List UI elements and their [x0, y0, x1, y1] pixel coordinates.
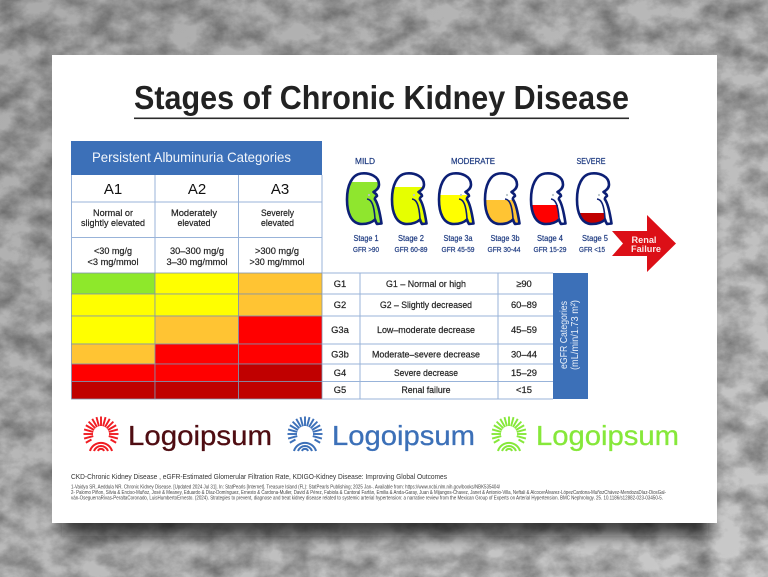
stage labels: GFR <15 — [579, 245, 605, 254]
row G5 — [334, 384, 532, 395]
stage labels — [353, 233, 608, 254]
stage labels: Stage 3b — [490, 233, 520, 243]
panel: persistent albuminuria categories table — [71, 141, 322, 273]
severity headings: SEVERE — [576, 157, 606, 166]
title: Stages of Chronic Kidney Disease — [134, 79, 629, 116]
column A1: Normal or — [93, 208, 133, 218]
logo: blue — [288, 416, 475, 451]
row G3b: Moderate–severe decrease — [372, 348, 480, 360]
icon: kidney stage 2 — [391, 173, 429, 226]
column A2: elevated — [178, 218, 210, 228]
references: ván-OseguerraRivas-PeraltaCoronado, LuisHumbertoErnesto. (2024). Strategies to prevent, diagnose and treat kidney disease related to systemic arterial hypertension: a narrative review from the Mexican Group of Experts on Arterial Hypertension. BMC Nephrology. 25. 10.1186/s12882-023-03450-5. — [71, 496, 663, 502]
stage labels: Stage 2 — [398, 233, 424, 243]
icon: kidney stage 3b — [484, 173, 522, 226]
icon: kidney stage 4 — [530, 173, 566, 226]
row G2: G2 — [334, 299, 346, 310]
row G1: G1 – Normal or high — [386, 278, 466, 289]
row G3a — [331, 324, 537, 335]
icon: kidney stage 3a — [438, 173, 476, 226]
row G2: G2 – Slightly decreased — [380, 299, 472, 310]
references: 1-Vaidya SR, Aeddula NR. Chronic Kidney Disease. [Updated 2024 Jul 31]. In: StatPearls [Internet]. Treasure Island (FL): StatPearls Publishing; 2025 Jan-. Available from: https://www.ncbi.nlm.nih.gov/books/NBK535404/ — [71, 484, 501, 490]
stage labels: Stage 4 — [537, 233, 563, 243]
stage labels: GFR 30-44 — [488, 245, 520, 254]
column A2: Moderately — [171, 208, 217, 218]
references: 2- Palomo Piñon, Silvia & Enciso-Muñoz, José & Meaney, Eduardo & Díaz-Domínguez, Ernesto & Cardona-Muller, David & Pérez, Fabiola & Cantoral Farfán, Emilia & Anda-Garay, Juan & Mijangos-Chavez, Janet & Antonio-Villa, Neftali & AlcocerÁlvarez-LópezCardona-MuñozChávez-MendozaDíaz-DiosGal- — [71, 489, 666, 496]
row G3a: Low–moderate decrease — [377, 324, 475, 335]
arrow: renal failure: Renal — [632, 235, 656, 246]
column A3 — [250, 181, 304, 267]
severity headings — [355, 157, 606, 166]
row G5: <15 — [516, 384, 532, 395]
column A1: <30 mg/g — [94, 246, 132, 256]
logo: green — [492, 416, 679, 451]
severity headings: MILD — [355, 157, 375, 166]
eGFR categories side label: eGFR Categories — [559, 301, 570, 369]
stage labels: GFR >90 — [353, 245, 379, 254]
heat map: risk grid — [72, 273, 322, 399]
stage labels: Stage 5 — [582, 233, 608, 243]
column A1: <3 mg/mmol — [88, 257, 138, 267]
stage labels: GFR 45-59 — [442, 245, 474, 254]
eGFR categories side label: (mL/min/1.73 m²) — [570, 300, 581, 370]
row G2: 60–89 — [511, 299, 537, 310]
row G3b: G3b — [331, 348, 349, 360]
column A2: 3–30 mg/mmol — [166, 257, 228, 267]
row G1: G1 — [334, 278, 346, 289]
abbreviations note: CKD-Chronic Kidney Disease , eGFR-Estimated Glomerular Filtration Rate, KDIGO-Kidney Disease: Improving Global Outcomes — [71, 472, 447, 481]
table header — [71, 141, 322, 175]
arrow: renal failure: Failure — [631, 244, 661, 255]
row G1: ≥90 — [516, 278, 532, 289]
panel: eGFR categories table — [322, 273, 588, 399]
logo: green: Logoipsum — [536, 420, 679, 451]
stage labels: GFR 60-89 — [394, 245, 428, 254]
column A3: >300 mg/g — [255, 246, 299, 256]
column A2: A2 — [188, 181, 206, 198]
row G4: G4 — [334, 367, 346, 378]
icon: kidney stage 5 — [576, 173, 612, 226]
stage labels: Stage 1 — [354, 233, 379, 243]
row G3a: G3a — [331, 324, 350, 335]
row G3b — [331, 348, 537, 360]
row G3b: 30–44 — [511, 348, 537, 360]
column A3: >30 mg/mmol — [250, 257, 304, 267]
row G5: G5 — [334, 384, 346, 395]
logo: dark red — [84, 416, 272, 451]
stage labels: GFR 15-29 — [534, 245, 566, 254]
arrow: renal failure — [612, 215, 676, 272]
column A1 — [81, 181, 145, 267]
references — [71, 484, 666, 502]
column A1: A1 — [104, 181, 122, 198]
row G2 — [334, 299, 537, 310]
eGFR categories side label — [553, 273, 588, 399]
column A2 — [166, 181, 228, 267]
row G4: Severe decrease — [394, 367, 458, 378]
severity headings: MODERATE — [451, 157, 495, 166]
stage labels: Stage 3a — [444, 233, 473, 243]
column A3: Severely — [261, 208, 294, 218]
column A3: elevated — [261, 218, 294, 228]
column A3: A3 — [271, 181, 289, 198]
column A2: 30–300 mg/g — [170, 246, 224, 256]
row G1 — [334, 278, 532, 289]
table header: Persistent Albuminuria Categories — [92, 149, 291, 165]
icon: kidney stage 1 — [346, 173, 384, 226]
white poster card — [52, 55, 717, 523]
row G3a: 45–59 — [511, 324, 537, 335]
row G4 — [334, 367, 537, 378]
logo: blue: Logoipsum — [332, 420, 475, 451]
row G4: 15–29 — [511, 367, 537, 378]
column A1: slightly elevated — [81, 218, 145, 228]
row G5: Renal failure — [402, 384, 450, 395]
logo: dark red: Logoipsum — [128, 420, 272, 451]
